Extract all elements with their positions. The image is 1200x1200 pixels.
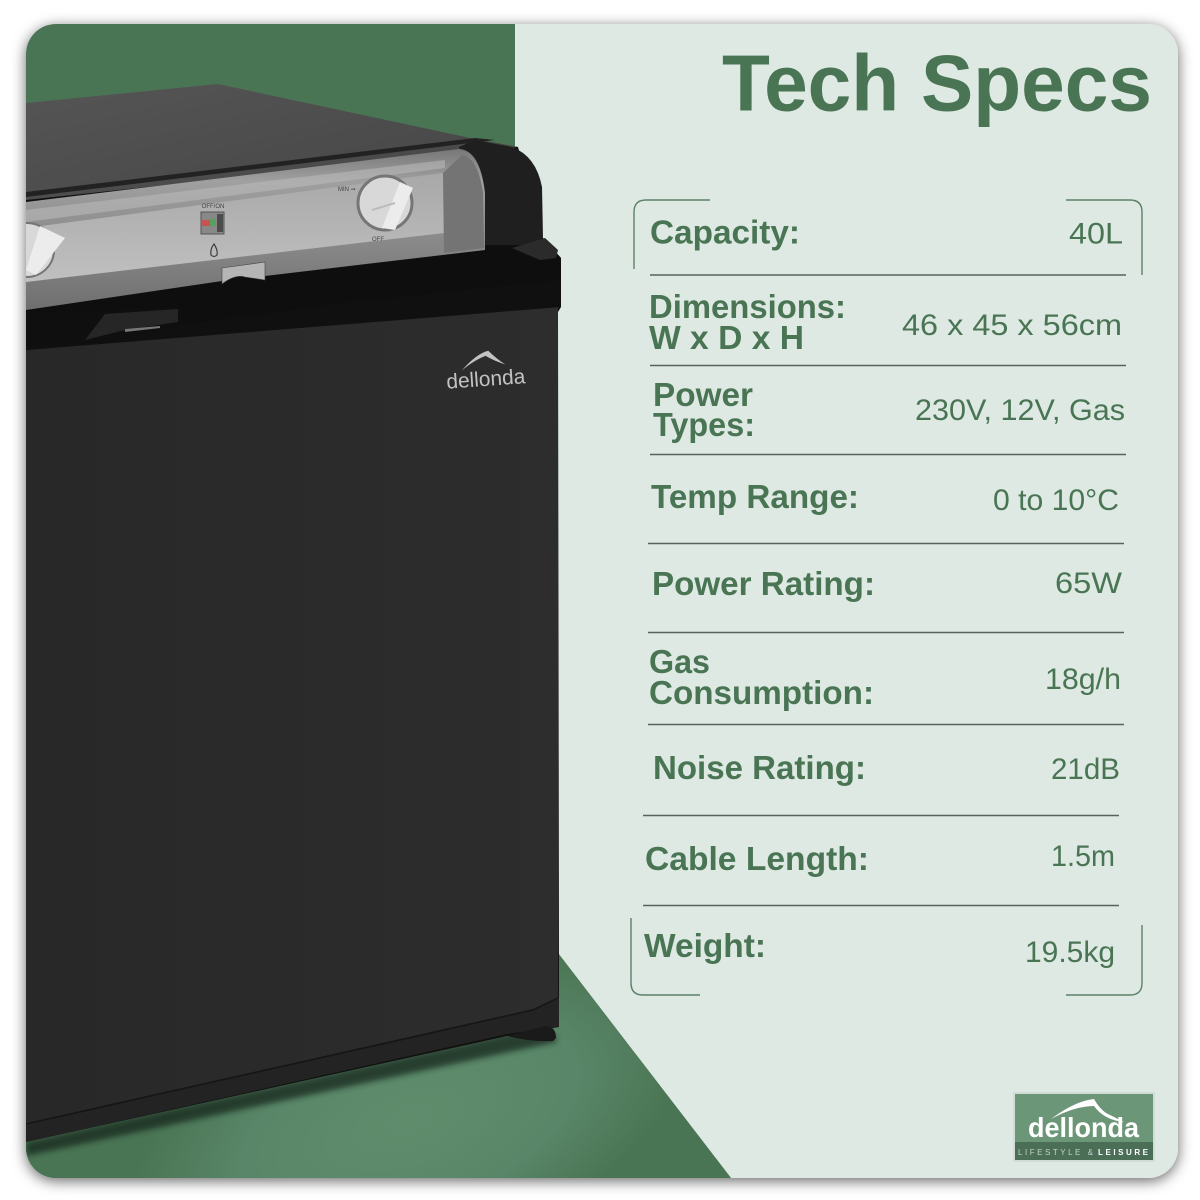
right black housing [459,142,543,245]
left dial [26,222,65,278]
row: power types: Power [653,376,753,413]
row: weight: Weight: [644,927,766,964]
row: dimensions [649,288,1122,356]
row: capacity: Capacity: [650,214,800,250]
glossy handle [26,307,181,347]
row: capacity: 40L [1069,218,1123,250]
row: dimensions: Dimensions: [649,288,846,325]
brand logo [1013,1092,1155,1162]
floor shadow [26,1034,556,1156]
row: noise rating: 21dB [1051,753,1120,786]
row: cable length: 1.5m [1051,840,1115,873]
row: power rating: Power Rating: [652,565,875,602]
row: power types: Types: [653,406,755,443]
door logo [447,350,526,389]
door logo: dellonda [446,365,526,394]
door hinge [512,238,558,260]
door top section [485,238,561,262]
kick strip seam [26,998,558,1124]
row: capacity [650,214,1123,250]
control plate [26,173,444,282]
dial label: off: OFF [372,237,384,243]
row: temp range [651,478,1119,517]
handle reflection [85,309,178,340]
icon: flame [211,244,217,256]
switch label: OFF/ON [202,204,224,210]
foot [507,1026,556,1041]
top rear edge line [26,138,495,197]
bottom bracket [631,918,1142,995]
fridge underlay [26,139,561,1142]
row: gas consumption: Gas [649,643,710,680]
right dial [358,176,413,230]
row: dimensions: W x D x H [649,319,804,356]
spec table [631,200,1142,995]
row: gas consumption: Consumption: [649,674,874,711]
row: power rating [652,565,1123,602]
row: noise rating: Noise Rating: [653,749,866,786]
row: power types: 230V, 12V, Gas [915,394,1125,427]
panel: green backdrop [26,24,731,1178]
row: weight: 19.5kg [1025,936,1115,969]
control panel cover [26,149,485,310]
row: temp range: 0 to 10°C [993,484,1119,517]
door body [26,307,558,1126]
highlight band [26,160,445,222]
row: gas consumption [649,643,1121,711]
title: Tech Specs [722,38,1152,128]
row: weight [644,927,1115,969]
row: power rating: 65W [1055,567,1123,600]
row: cable length: Cable Length: [645,840,869,877]
row: dimensions: 46 x 45 x 56cm [902,309,1122,342]
brand logo: dellonda [1028,1112,1139,1143]
product photo: black fridge [0,84,561,1156]
latch [222,262,265,284]
kick strip [26,997,559,1142]
row: noise rating [653,749,1120,786]
row: power types [653,376,1125,443]
row: cable length [645,840,1115,877]
fridge top surface [26,84,518,200]
row: temp range: Temp Range: [651,478,859,515]
door seam highlight [190,307,558,337]
brand logo: LEISURE [1098,1148,1149,1157]
dial label: min: MIN ➞ [338,187,356,193]
brand logo: LIFESTYLE & [1018,1148,1094,1157]
power switch [201,212,224,234]
row: gas consumption: 18g/h [1045,663,1121,696]
clear cover end [443,155,484,253]
top bracket [634,200,1142,275]
